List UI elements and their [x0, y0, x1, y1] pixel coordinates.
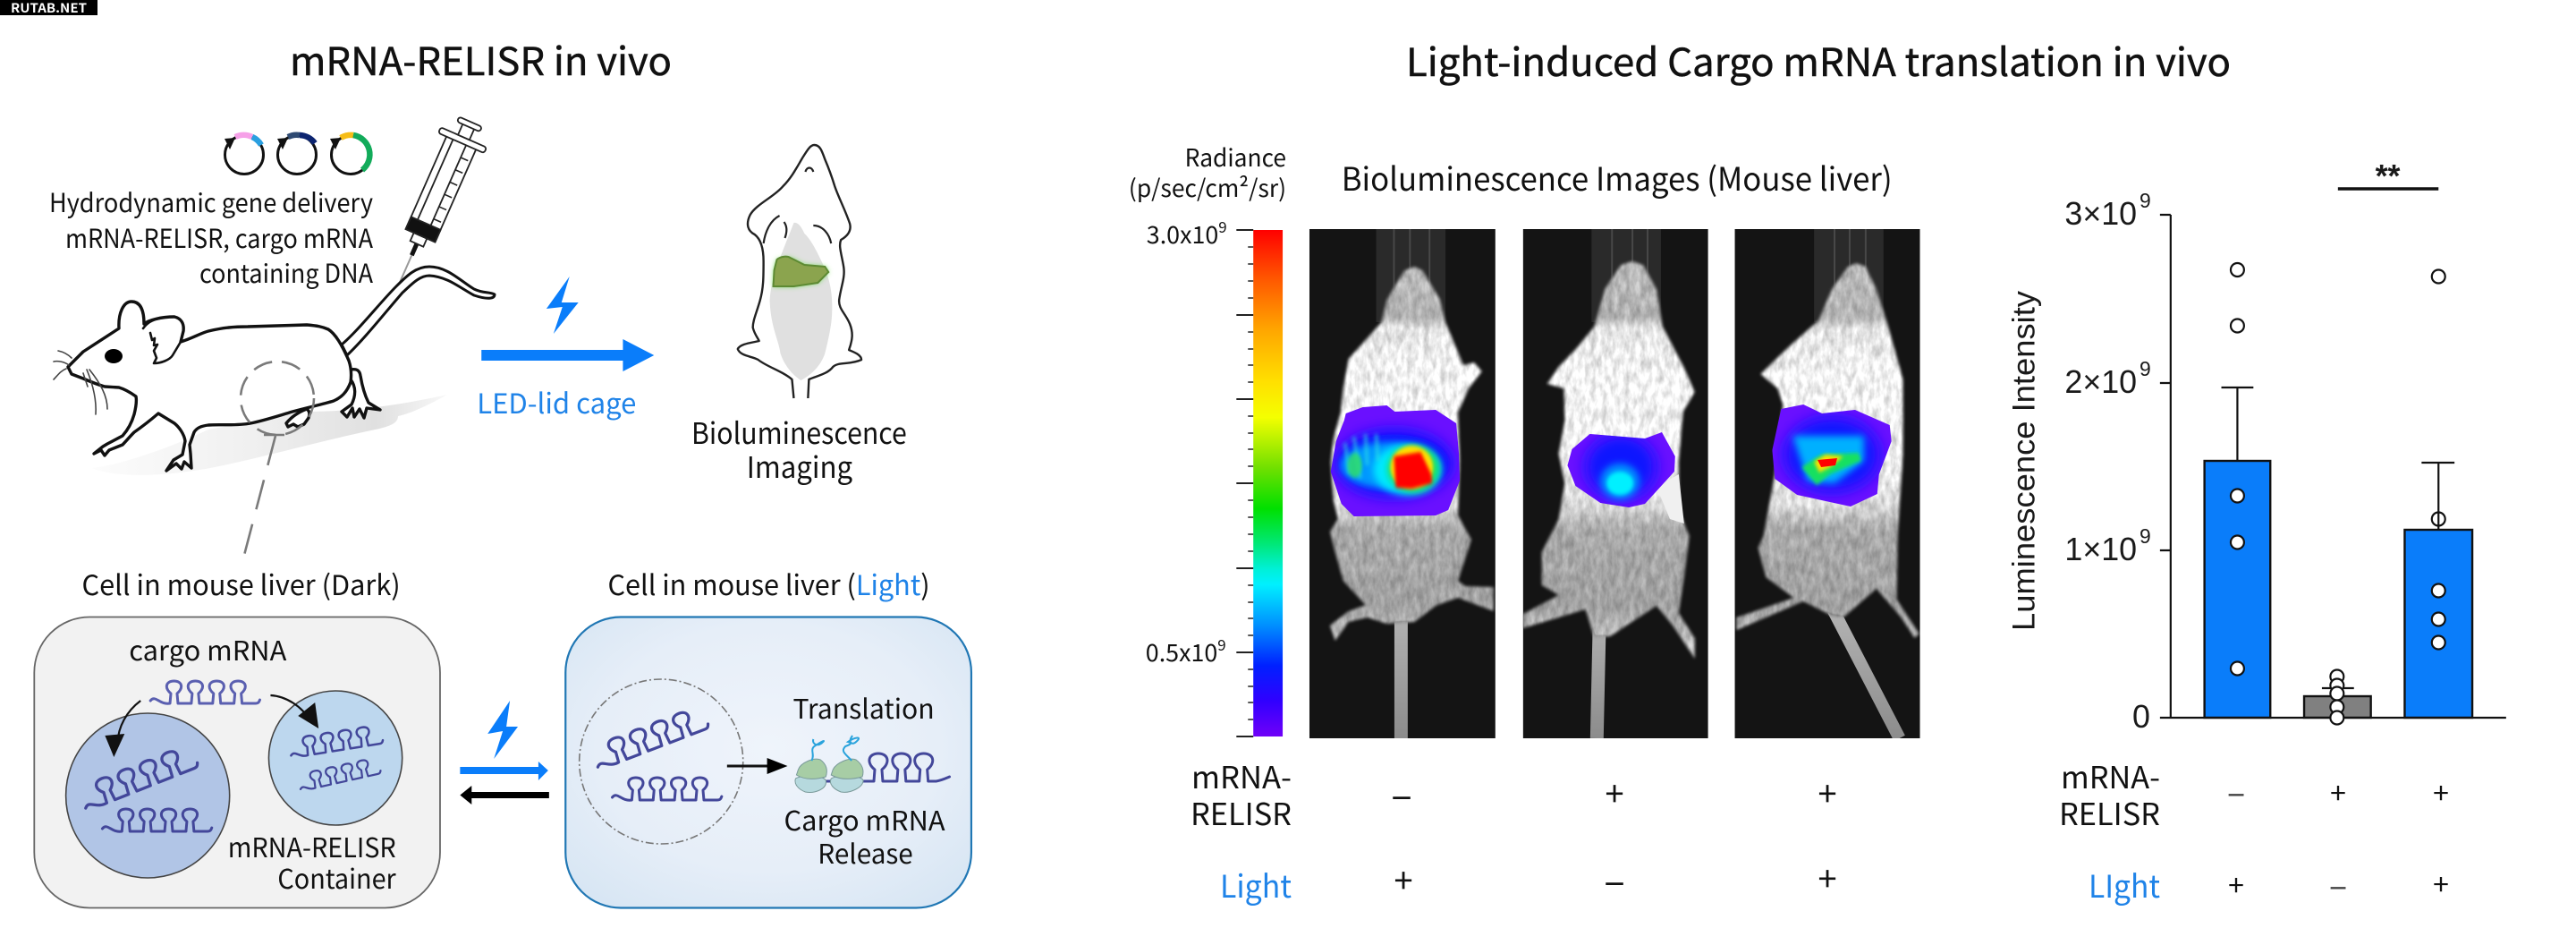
label: Cargo mRNA Release: Cargo mRNA — [784, 799, 945, 839]
bars — [2205, 461, 2472, 718]
panel: cell in light — [565, 617, 971, 907]
significance marker: ** — [2376, 158, 2401, 194]
icon: three DNA plasmids — [225, 135, 370, 174]
bar chart — [2007, 158, 2506, 735]
image: mouse 3 — [1735, 229, 1920, 738]
panel: left workflow artwork — [34, 145, 971, 907]
scale max label: 3.0x10 — [1147, 216, 1218, 251]
icon: blue lightning bolt — [547, 277, 579, 334]
y axis tick labels: 3×10 — [2064, 196, 2137, 232]
y axis tick labels — [2064, 189, 2151, 735]
text block: hydrodynamic gene delivery — [49, 183, 373, 291]
label: Bioluminescence Imaging: Bioluminescence — [691, 411, 907, 453]
label: Translation: Translation — [792, 687, 935, 727]
plus-minus row: chart: – — [2227, 765, 2245, 814]
label: radiance units: (p/sec/cm²/sr) — [1129, 169, 1286, 204]
icon: side-view mouse — [54, 267, 495, 471]
dissolved container — [580, 679, 743, 844]
plus-minus row: images: + — [1818, 852, 1837, 901]
dashed circle and zoom line — [241, 362, 314, 562]
significance marker — [2338, 158, 2438, 194]
mouse outline — [738, 145, 861, 398]
table labels: bioluminescence images: Light — [1220, 862, 1292, 907]
far hind leg — [342, 370, 380, 418]
image: mouse 2 — [1523, 229, 1708, 738]
heading: cell dark: Cell in mouse liver (Dark) — [82, 563, 401, 603]
arrow: forward blue — [460, 762, 548, 780]
mouse eye — [105, 349, 123, 363]
forelimbs and mouth — [764, 168, 831, 243]
body grey region — [770, 223, 832, 380]
panel: cell in dark — [34, 617, 440, 907]
image: mouse 1 — [1309, 229, 1496, 738]
shadow under mouse — [92, 395, 447, 475]
heading: cell light: Cell in mouse liver (Light) — [608, 563, 930, 603]
icon: top-view mouse with liver — [738, 145, 861, 398]
text block: hydrodynamic gene delivery: Hydrodynamic gene delivery — [49, 183, 373, 220]
plasmid 2 — [277, 135, 317, 174]
heading: bioluminescence images: Bioluminescence Images (Mouse liver) — [1342, 154, 1893, 200]
table labels: bioluminescence images: mRNA- — [1191, 753, 1292, 797]
label: LED-lid cage: LED-lid cage — [477, 381, 636, 421]
label: Bioluminescence Imaging — [691, 411, 907, 487]
plus-minus row: chart: – — [2329, 858, 2347, 907]
plus-minus row: images: + — [1394, 854, 1413, 903]
y axis tick labels: 0 — [2132, 699, 2150, 735]
label: Bioluminescence Imaging: Imaging — [747, 445, 853, 487]
heatmap: mouse 3 — [1772, 404, 1892, 507]
data points — [2231, 263, 2445, 725]
label: radiance units — [1129, 139, 1286, 204]
container: large droplet — [66, 713, 230, 878]
text block: hydrodynamic gene delivery: containing DNA — [199, 253, 373, 291]
y axis tick labels: 9 — [2140, 189, 2151, 212]
plus-minus row: chart: + — [2228, 864, 2244, 905]
plus-minus row: chart — [2227, 765, 2449, 907]
y axis tick labels: 2×10 — [2064, 364, 2137, 400]
y axis tick labels: 1×10 — [2064, 532, 2137, 567]
icon: middle lightning bolt — [487, 701, 518, 759]
plus-minus row: images: – — [1391, 763, 1412, 821]
y axis tick labels: 9 — [2140, 357, 2151, 380]
whiskers — [54, 351, 107, 414]
cargo mRNA strands — [78, 681, 384, 831]
plus-minus row: images: + — [1605, 767, 1624, 816]
plasmid 3 — [330, 135, 370, 174]
label: Cargo mRNA Release — [784, 799, 945, 872]
plus-minus row: chart: + — [2330, 771, 2346, 813]
plus-minus row: chart: + — [2433, 771, 2449, 813]
text block: hydrodynamic gene delivery: mRNA-RELISR, cargo mRNA — [65, 218, 373, 256]
table labels: chart: RELISR — [2059, 790, 2160, 834]
arrow: reverse black — [460, 786, 549, 805]
plus-minus row: images: + — [1818, 767, 1837, 816]
colour scale bar — [1146, 215, 1283, 736]
icon: syringe — [375, 112, 494, 296]
axes — [2160, 215, 2506, 718]
plus-minus row: images — [1391, 763, 1837, 907]
table labels: chart — [2059, 753, 2160, 907]
label: mRNA-RELISR Container — [228, 826, 396, 897]
arrow to translation — [727, 758, 787, 774]
title: mRNA-RELISR in vivo: mRNA-RELISR in vivo — [290, 31, 672, 87]
y axis tick labels: 9 — [2140, 524, 2151, 548]
released mRNA strands — [590, 705, 722, 800]
error bars — [2222, 387, 2454, 696]
label: cargo mRNA: cargo mRNA — [129, 629, 287, 668]
nascent peptide chains — [811, 736, 859, 761]
panel: bioluminescence images — [1129, 139, 1920, 738]
table labels: bioluminescence images: RELISR — [1191, 790, 1292, 834]
plasmid 1 — [225, 135, 263, 174]
heatmap: mouse 2 — [1567, 432, 1675, 507]
label: Cargo mRNA Release: Release — [818, 832, 913, 872]
table labels: chart: LIght — [2089, 862, 2160, 907]
scale min label: 9 — [1217, 633, 1226, 655]
ribosomes — [795, 759, 863, 792]
heatmap: mouse 1 — [1331, 405, 1460, 516]
label: radiance units: Radiance — [1185, 139, 1286, 174]
scale min label: 0.5x10 — [1146, 634, 1217, 668]
arrows into containers — [105, 695, 318, 757]
liver glow — [774, 258, 828, 286]
label: mRNA-RELISR Container: mRNA-RELISR — [228, 826, 396, 865]
y axis title: Luminescence Intensity — [2007, 290, 2042, 631]
table labels: bioluminescence images — [1191, 753, 1292, 907]
plus-minus row: chart: + — [2433, 863, 2449, 904]
title: light-induced translation: Light-induced Cargo mRNA translation in vivo — [1406, 32, 2231, 88]
near hind paw — [286, 409, 309, 427]
scale max label: 9 — [1218, 215, 1227, 237]
plus-minus row: images: – — [1604, 849, 1625, 907]
mouse tail — [342, 267, 495, 355]
table labels: chart: mRNA- — [2061, 753, 2160, 797]
mouse ear detail — [143, 319, 181, 363]
translated mRNA — [823, 753, 950, 781]
label: mRNA-RELISR Container: Container — [277, 857, 396, 897]
container: small droplet — [268, 691, 402, 825]
mouse body — [68, 302, 352, 471]
liver — [774, 257, 828, 286]
arrow: blue rightward — [481, 339, 654, 371]
